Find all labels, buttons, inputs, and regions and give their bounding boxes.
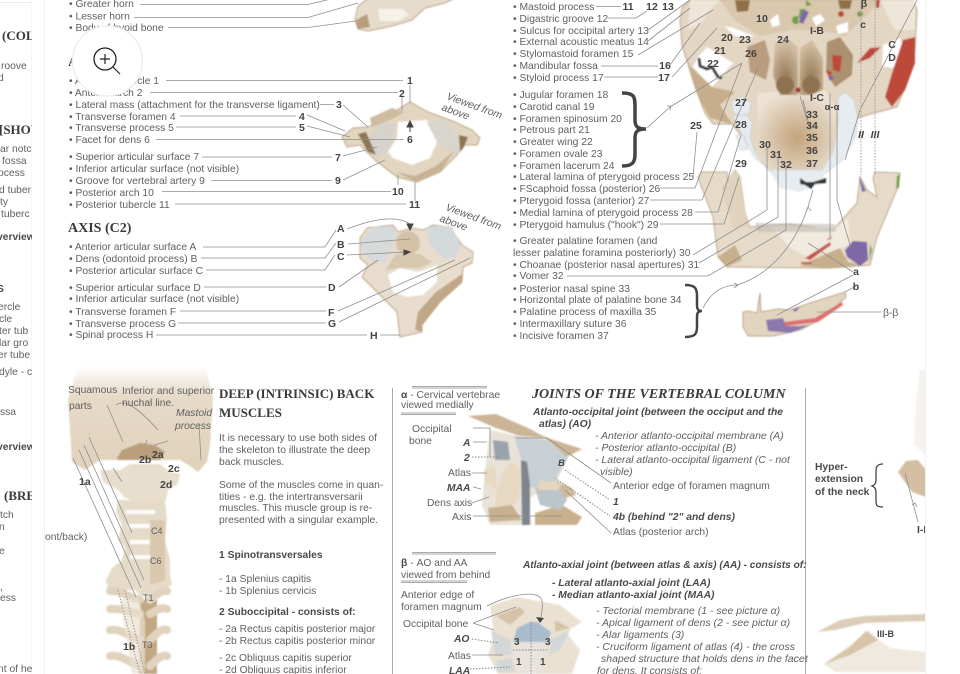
labels: skull column: • Posterior nasal spine 33 [513, 284, 630, 295]
labels: skull column: • Vomer 32 [513, 271, 564, 282]
labels: skull column: C [888, 39, 896, 51]
text: deep back muscles: presented with a singular example. [219, 515, 378, 526]
labels: skull column: I-C [810, 92, 824, 104]
text: joints of the vertebral column: - Apical ligament of dens (2 - see pictur α) [596, 617, 790, 629]
text: deep back muscles: muscles. This muscle group is re- [219, 503, 372, 514]
text: deep back muscles: back muscles. [219, 457, 284, 468]
labels: skull column: • Jugular foramen 18 [513, 90, 608, 101]
labels: spine figure: T3 [142, 640, 153, 650]
labels: skull column [513, 0, 917, 342]
labels: atlas: 9 [335, 175, 341, 187]
labels: atlas: 2 [399, 88, 405, 100]
illustration: mandible [698, 170, 900, 268]
labels: skull column: • Horizontal plate of palatine bone 34 [513, 295, 682, 306]
labels: skull column: • Petrous part 21 [513, 125, 590, 136]
illustration: skull base and maxilla [680, 0, 917, 192]
labels: skull column: 34 [806, 120, 818, 132]
magnifier button [72, 26, 142, 96]
labels: skull column: • Mandibular fossa [513, 61, 598, 72]
text: joints of the vertebral column: 4b (behind "2" and dens) [612, 512, 735, 523]
text: beta caption: 3 [545, 637, 551, 648]
labels: skull column: • Stylomastoid foramen 15 [513, 49, 634, 60]
labels: spine figure: 2b [139, 454, 151, 466]
labels: skull column: 10 [756, 13, 768, 25]
text: deep back muscles: the skeleton to illustrate the deep [219, 445, 370, 456]
labels: skull column: • Carotid canal 19 [513, 102, 595, 113]
labels: skull column: III [871, 129, 880, 141]
labels: spine figure: ont/back) [45, 532, 87, 543]
text: joints of the vertebral column: - Tectorial membrane (1 - see picture α) [596, 605, 780, 617]
illustration: hyoid bone [355, 0, 455, 31]
text: joints of the vertebral column: Anterior edge of foramen magnum [613, 481, 770, 492]
labels: skull column: a [853, 266, 859, 278]
labels: atlas: 5 [299, 122, 305, 134]
text: beta caption: 1 [516, 657, 522, 668]
labels: skull column: • Choanae (posterior nasal apertures) 31 [513, 260, 699, 271]
illustration: cropped right column: Hyper- [815, 462, 848, 473]
labels: atlas: • Inferior articular surface (not visible) [69, 164, 239, 175]
text: joints of the vertebral column: JOINTS OF THE VERTEBRAL COLUMN [531, 387, 786, 402]
brace: palate [685, 285, 702, 337]
labels: skull column: 36 [806, 145, 818, 157]
labels: atlas: 3 [336, 99, 342, 111]
text: alpha caption: A [462, 438, 470, 449]
labels: skull column: • Styloid process 17 [513, 73, 604, 84]
labels: axis: H [370, 330, 378, 342]
labels: spine figure: C4 [151, 526, 163, 536]
heading: DEEP (INTRINSIC) BACK [219, 386, 375, 401]
labels: axis: above [438, 213, 469, 234]
labels: atlas: 11 [409, 199, 420, 211]
labels: skull column: c [860, 19, 866, 31]
labels: skull column: 11 [622, 1, 634, 13]
text: alpha caption: Atlas [448, 468, 471, 479]
illustration: posterior cervical spine [68, 366, 213, 674]
labels: skull column: 16 [659, 60, 671, 72]
text: deep back muscles: MUSCLES [219, 405, 282, 420]
labels: axis: C [337, 251, 345, 263]
labels: atlas: • Facet for dens 6 [69, 135, 150, 146]
labels: spine figure: nuchal line. [122, 398, 174, 409]
labels: atlas: 4 [299, 111, 305, 123]
labels: skull column: 31 [770, 149, 782, 161]
text: joints of the vertebral column: - Median atlanto-axial joint (MAA) [552, 590, 715, 601]
panel: cropped left column: , [0, 582, 3, 593]
labels: skull column: • Pterygoid hamulus ("hook") 29 [513, 220, 659, 231]
labels: skull column: I-B [810, 25, 824, 37]
labels: spine figure: Mastoid [176, 408, 212, 419]
labels: skull column: II [858, 129, 865, 141]
labels: spine figure [45, 385, 215, 674]
labels: spine figure: 2a [152, 449, 164, 461]
labels: axis: D [328, 282, 336, 294]
labels: spine figure: 1b [123, 641, 135, 653]
labels: axis: • Dens (odontoid process) B [69, 254, 198, 265]
labels: skull column: • Intermaxillary suture 36 [513, 319, 627, 330]
labels: spine figure: 1a [79, 476, 91, 488]
heading: axis: AXIS (C2) [68, 221, 132, 236]
text: alpha caption: viewed medially [401, 400, 475, 411]
labels: skull column: • Sulcus for occipital artery 13 [513, 26, 649, 37]
text: beta caption: 3 [514, 637, 520, 648]
panel: cropped left column: ess [0, 593, 16, 604]
illustration: alpha joint section [468, 414, 582, 525]
labels: skull column: 29 [735, 158, 747, 170]
labels: atlas: 1 [407, 75, 413, 87]
labels: axis: B [337, 239, 345, 251]
illustration: mandible section beta [743, 292, 846, 336]
labels: skull column: 37 [806, 158, 818, 170]
labels: axis [69, 202, 503, 342]
labels: skull column: 12 [646, 1, 658, 13]
column dividers [392, 388, 806, 674]
text: deep back muscles: - 1b Splenius cervicis [219, 586, 316, 597]
labels: skull column: • Pterygoid fossa (anterior) 27 [513, 196, 650, 207]
labels: atlas: • Posterior tubercle 11 [69, 200, 170, 211]
text: joints of the vertebral column: Atlanto-axial joint (between atlas & axis) (AA) - consists of: [522, 560, 807, 571]
labels: axis: • Posterior articular surface C [69, 266, 204, 277]
labels: skull column: 35 [806, 132, 818, 144]
labels: axis: A [337, 223, 345, 235]
labels: skull column: 24 [777, 34, 789, 46]
labels: atlas: 10 [392, 186, 404, 198]
panel: cropped left column: (COL [2, 28, 35, 43]
labels: spine figure: 2d [160, 479, 172, 491]
labels: skull column: 28 [735, 119, 747, 131]
labels: spine figure: Squamous [68, 385, 117, 396]
text: joints of the vertebral column: - Lateral atlanto-occipital ligament (C - not [595, 454, 791, 466]
labels: axis: • Transverse foramen F [69, 307, 176, 318]
text: deep back muscles: 2 Suboccipital - consists of: [219, 607, 356, 618]
text: beta caption: β - AO and AA [401, 558, 468, 569]
panel: cropped left column: (BRE [4, 488, 35, 503]
labels: atlas: • Groove for vertebral artery 9 [69, 176, 205, 187]
illustration: atlas C1 [342, 102, 480, 182]
text: joints of the vertebral column: Atlas (posterior arch) [613, 527, 709, 538]
text: joints of the vertebral column: shaped structure that holds dens in the facet [601, 653, 809, 665]
text: beta caption: Anterior edge of [401, 590, 474, 601]
labels: atlas: 7 [335, 152, 341, 164]
text: beta caption: viewed from behind [401, 570, 491, 581]
text: beta caption: Atlas [448, 651, 471, 662]
labels: atlas: • Lateral mass (attachment for the transverse ligament) [69, 100, 320, 111]
text: alpha caption: Axis [452, 512, 471, 523]
labels: axis: • Superior articular surface D [69, 283, 201, 294]
panel: cropped left column [0, 2, 32, 674]
text: joints of the vertebral column: - Alar ligaments (3) [596, 629, 684, 641]
labels: spine figure: C6 [150, 556, 162, 566]
text: alpha caption: Occipital [412, 424, 451, 435]
text: beta caption: AO [453, 634, 469, 645]
text: beta caption [401, 552, 551, 674]
labels: skull column: • Palatine process of maxilla 35 [513, 307, 657, 318]
panel: cropped left column: tuberc [1, 209, 30, 220]
illustration: cropped right column: I-B [917, 524, 931, 536]
labels: atlas [69, 75, 504, 211]
panel: cropped left column: ar notc [0, 144, 31, 155]
labels: skull column: • Lateral lamina of pterygoid process 25 [513, 172, 694, 183]
labels: atlas: • Anterior arch 2 [69, 88, 143, 99]
labels: hyoid: • Body of hyoid bone [69, 23, 164, 34]
labels: axis: • Transverse process G [69, 319, 176, 330]
labels: skull column: lesser palatine foramina posteriorly) 30 [513, 248, 691, 259]
panel: cropped left column: ssa [0, 407, 16, 418]
labels: skull column: • Digastric groove 12 [513, 14, 608, 25]
labels: skull column: • Medial lamina of pterygoid process 28 [513, 208, 693, 219]
labels: atlas: • Anterior tubercle 1 [69, 76, 159, 87]
labels: skull column: 25 [690, 120, 702, 132]
labels: skull column: • Foramen spinosum 20 [513, 114, 622, 125]
panel: cropped left column: [SHOU [0, 122, 41, 137]
text: joints of the vertebral column: - Cruciform ligament of atlas (4) - the cross [596, 641, 796, 653]
labels: skull column: α-α [825, 102, 840, 113]
labels: atlas: above [440, 102, 471, 123]
labels: skull column: • Incisive foramen 37 [513, 331, 609, 342]
labels: skull column: 26 [745, 48, 757, 60]
illustration: cropped right column: of the neck [815, 487, 870, 498]
labels: atlas: • Posterior arch 10 [69, 188, 154, 199]
labels: spine figure: parts [69, 401, 92, 412]
text: deep back muscles: Some of the muscles come in quan- [219, 480, 383, 491]
labels: atlas: Viewed from [445, 91, 504, 122]
labels: atlas: • Transverse foramen 4 [69, 112, 176, 123]
text: alpha caption: B [558, 458, 565, 469]
labels: skull column: • FScaphoid fossa (posterior) 26 [513, 184, 661, 195]
text: joints of the vertebral column: - Posterior atlanto-occipital (B) [595, 442, 736, 454]
panel: cropped left column: fossa [2, 156, 27, 167]
text: joints of the vertebral column: - Lateral atlanto-axial joint (LAA) [552, 578, 711, 589]
labels: skull column: D [888, 52, 896, 64]
text: alpha caption: Dens axis [427, 498, 472, 509]
labels: skull column: • Mastoid process [513, 2, 594, 13]
labels: skull column: • Greater wing 22 [513, 137, 593, 148]
illustration: cropped right column: III-B [877, 629, 894, 639]
text: deep back muscles: 1 Spinotransversales [219, 550, 323, 561]
panel: cropped left column: roove [1, 61, 27, 72]
text: alpha caption: α - Cervical vertebrae [401, 390, 500, 401]
labels: skull column: 17 [658, 72, 670, 84]
text: joints of the vertebral column: atlas) (AO) [539, 419, 592, 430]
labels: skull column: b [853, 281, 859, 293]
labels: axis: • Inferior articular surface (not visible) [69, 294, 239, 305]
labels: spine figure: 2c [168, 463, 180, 475]
text: joints of the vertebral column: Atlanto-occipital joint (between the occiput and the [532, 407, 783, 418]
labels: atlas: 6 [407, 134, 413, 146]
labels: skull column: β-β [883, 308, 898, 319]
labels: axis: Viewed from [444, 202, 503, 233]
labels: axis: • Anterior articular surface A [69, 242, 196, 253]
text: deep back muscles: - 2b Rectus capitis posterior minor [219, 636, 376, 647]
labels: skull column: 32 [780, 159, 792, 171]
text: deep back muscles [219, 386, 383, 674]
labels: hyoid: • Lesser horn [69, 12, 130, 22]
labels: axis: • Spinal process H [69, 330, 153, 341]
text: deep back muscles: It is necessary to use both sides of [219, 433, 377, 444]
text: deep back muscles: - 1a Splenius capitis [219, 574, 311, 585]
labels: skull column: • External acoustic meatus 14 [513, 37, 649, 48]
text: deep back muscles: tities - e.g. the intertransversarii [219, 492, 363, 503]
panel: cropped left column: ty [0, 197, 9, 208]
illustration: cropped right column [815, 370, 931, 672]
labels: skull column: 30 [759, 139, 771, 151]
labels: skull column: • Foramen ovale 23 [513, 149, 603, 160]
labels: atlas: • Transverse process 5 [69, 123, 174, 134]
labels: skull column: 20 [721, 32, 733, 44]
brace: cranial base foramina [622, 93, 646, 166]
labels: axis: G [328, 318, 336, 330]
panel: cropped left column: tch [0, 510, 14, 521]
text: joints of the vertebral column: 1 [613, 497, 619, 508]
labels: skull column: 33 [806, 109, 818, 121]
labels: skull column: • Greater palatine foramen (and [513, 236, 658, 247]
illustration: beta joint view [488, 597, 582, 674]
text: alpha caption: MAA [447, 483, 470, 494]
labels: skull column: 23 [739, 34, 751, 46]
text: deep back muscles: - 2c Obliquus capitis superior [219, 653, 352, 664]
labels: spine figure: process [174, 421, 211, 432]
labels: spine figure: T1 [143, 593, 154, 603]
text: beta caption: Occipital bone [403, 619, 469, 630]
text: alpha caption: bone [409, 436, 432, 447]
illustration: axis C2 [360, 225, 473, 337]
text: alpha caption: 2 [463, 453, 470, 464]
labels: skull column: 27 [735, 97, 747, 109]
text: alpha caption [401, 386, 611, 533]
labels: hyoid [69, 0, 358, 34]
labels: axis: F [328, 307, 335, 319]
labels: skull column: 22 [707, 58, 719, 70]
labels: spine figure: Inferior and superior [122, 386, 215, 397]
text: joints of the vertebral column [522, 387, 809, 674]
labels: atlas: • Superior articular surface 7 [69, 152, 199, 163]
labels: skull column: 21 [714, 45, 726, 57]
text: beta caption: 1 [540, 657, 546, 668]
labels: skull column: 13 [662, 1, 674, 13]
illustration: cropped right column: extension [815, 474, 863, 485]
text: deep back muscles: - 2a Rectus capitis posterior major [219, 624, 376, 635]
text: joints of the vertebral column: - Anterior atlanto-occipital membrane (A) [595, 430, 784, 442]
labels: skull column: • Foramen lacerum 24 [513, 161, 615, 172]
text: beta caption: foramen magnum [401, 602, 482, 613]
heading: atlas: ATLAS (C1) [68, 55, 144, 70]
text: joints of the vertebral column: visible) [600, 466, 633, 478]
